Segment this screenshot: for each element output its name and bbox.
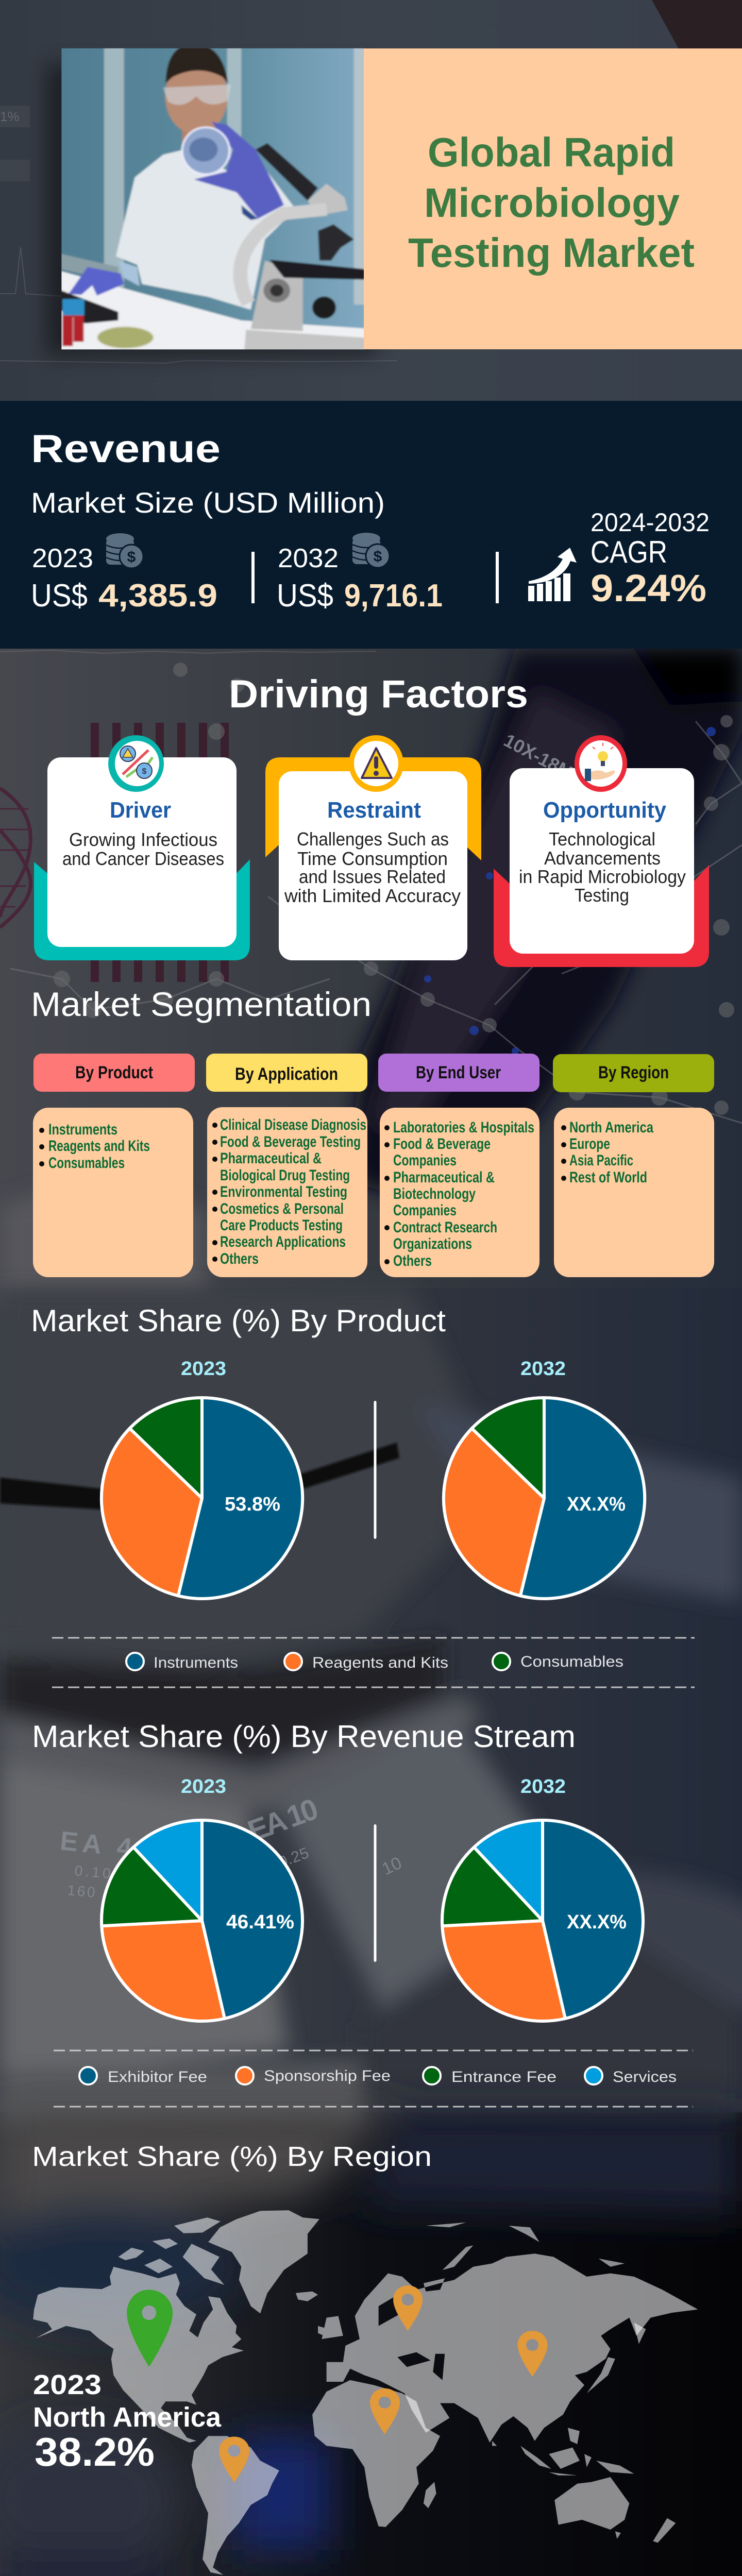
pie chart: product 2023	[102, 1358, 302, 1599]
stat 2032: 2032	[278, 544, 339, 573]
microscope lens lettering: EA 10	[243, 1792, 323, 1848]
pie chart: revenue stream 2023: 2023	[181, 1776, 226, 1798]
microscope lens lettering	[59, 1792, 405, 1901]
legend: product: Reagents and Kits	[312, 1654, 448, 1671]
restraint text: and Issues Related	[299, 866, 446, 887]
hero banner	[46, 40, 742, 358]
title text: Global Rapid	[428, 129, 675, 175]
divider	[374, 1824, 376, 1962]
photo: scientist with petri dish and microscope	[61, 48, 364, 349]
map pins	[127, 2285, 547, 2483]
legend: revenue stream: Sponsorship Fee	[264, 2067, 391, 2084]
pie chart: product 2032	[444, 1358, 645, 1599]
divider	[496, 552, 499, 603]
regional callout: North America	[33, 2402, 222, 2433]
stat 2032: US$	[277, 578, 333, 614]
segment: by end user	[378, 1054, 539, 1277]
market size subtitle: Market Size (USD Million)	[31, 486, 385, 519]
segment: by end user: Others	[393, 1252, 432, 1269]
segment: by end user: Contract Research	[393, 1219, 497, 1236]
icon: hand with light bulb	[575, 735, 627, 792]
segment: by region: Asia Pacific	[569, 1152, 633, 1169]
opportunity text	[519, 828, 686, 906]
driver text	[62, 829, 224, 869]
segment: by end user: Organizations	[393, 1235, 472, 1252]
segment: by application: Pharmaceutical &	[220, 1150, 322, 1167]
icon: driver gears and arrows	[108, 735, 164, 792]
segment: by end user: Food & Beverage	[393, 1136, 491, 1153]
segment: by product	[33, 1054, 195, 1277]
panel: restraint	[265, 735, 481, 960]
segment: by application: Environmental Testing	[220, 1183, 347, 1200]
segment: by end user: Pharmaceutical &	[393, 1169, 495, 1186]
legend: product: Instruments	[154, 1654, 238, 1671]
stat 2032: 9,716.1	[344, 578, 443, 614]
pin: south america	[219, 2437, 249, 2483]
segment: by application: Clinical Disease Diagnosis	[220, 1116, 366, 1133]
opportunity heading: Opportunity	[543, 798, 667, 823]
stat 2023: 2023	[32, 544, 93, 573]
title text	[408, 129, 695, 276]
pie chart: revenue stream 2032: 2032	[520, 1776, 566, 1798]
tube lettering: 10X-18MM	[500, 730, 591, 791]
segment: by product: Consumables	[48, 1155, 125, 1172]
pin: asia	[518, 2331, 547, 2377]
icon: coins 2032: $	[374, 548, 382, 565]
revenue band	[0, 401, 742, 649]
segment: by application: Cosmetics & Personal	[220, 1200, 344, 1217]
pie chart: revenue stream 2032	[442, 1776, 643, 2021]
pie chart: revenue stream 2023: 46.41%	[226, 1911, 294, 1933]
revenue heading: Revenue	[31, 427, 221, 471]
opportunity text: Technological	[549, 828, 655, 850]
legend: revenue stream: Exhibitor Fee	[108, 2069, 207, 2086]
segment: by application: Care Products Testing	[220, 1217, 343, 1234]
segment: by end user: Laboratories & Hospitals	[393, 1119, 534, 1136]
segment: by region: Rest of World	[569, 1169, 647, 1186]
title text: Microbiology	[424, 180, 680, 226]
stat 2023: US$	[31, 578, 88, 614]
microscope lens lettering: 160	[66, 1882, 96, 1901]
restraint heading: Restraint	[327, 798, 421, 823]
microscope lens lettering: 10	[379, 1853, 405, 1879]
regional callout: 38.2%	[35, 2429, 155, 2475]
panel: driver	[34, 735, 250, 960]
divider	[374, 1401, 376, 1539]
regional callout	[33, 2369, 222, 2475]
segment: by application: By Application	[235, 1064, 338, 1084]
segment: by application: Food & Beverage Testing	[220, 1133, 361, 1150]
opportunity text: Advancements	[544, 848, 661, 869]
legend: product: Consumables	[520, 1653, 623, 1670]
regional callout: 2023	[33, 2369, 102, 2400]
pin: europe	[393, 2285, 423, 2331]
heading: market share by revenue stream: Market Share (%) By Revenue Stream	[32, 1719, 576, 1754]
driver heading: Driver	[110, 798, 171, 823]
title panel	[364, 48, 742, 349]
opportunity text: in Rapid Microbiology	[519, 866, 686, 887]
cagr stat: CAGR	[591, 535, 667, 569]
legend: product	[52, 1638, 695, 1687]
segment: by end user: Companies	[393, 1152, 457, 1169]
driver text: and Cancer Diseases	[62, 848, 224, 869]
icon: growth chart arrow	[528, 548, 577, 601]
segment: by end user: Companies	[393, 1202, 457, 1219]
divider	[251, 552, 255, 603]
segment: by product: Reagents and Kits	[48, 1138, 150, 1155]
legend: revenue stream: Services	[613, 2069, 677, 2086]
pie chart: revenue stream 2032: XX.X%	[567, 1911, 627, 1933]
restraint text: Challenges Such as	[297, 828, 449, 850]
icon: driver gears and arrows: $	[142, 767, 147, 776]
pie chart: product 2032: XX.X%	[567, 1494, 626, 1515]
segment: by application	[206, 1054, 367, 1277]
heading: market share by region: Market Share (%) By Region	[32, 2141, 432, 2172]
world map	[33, 2210, 698, 2575]
legend: revenue stream	[54, 2050, 693, 2107]
heading: driving factors: Driving Factors	[229, 672, 528, 716]
microscope lens lettering: 0.25	[276, 1844, 311, 1871]
segment: by application: Research Applications	[220, 1233, 346, 1250]
photo shadow	[46, 64, 376, 355]
faint axis text: 1%	[0, 109, 20, 124]
pie chart: revenue stream 2023	[102, 1776, 302, 2021]
legend: revenue stream: Entrance Fee	[451, 2069, 556, 2086]
pie chart: product 2023: 2023	[181, 1358, 226, 1380]
icon: coins 2023	[106, 533, 143, 568]
opportunity text: Testing	[575, 885, 629, 906]
icon: coins 2032	[352, 533, 390, 568]
segment: by region: By Region	[598, 1063, 669, 1082]
stat 2023: 4,385.9	[98, 578, 217, 614]
panel: opportunity	[494, 735, 709, 967]
pin: africa	[370, 2388, 400, 2434]
pie chart: product 2032: 2032	[520, 1358, 566, 1380]
cagr stat: 2024-2032	[591, 508, 710, 537]
microscope lens lettering: EA 4	[59, 1826, 133, 1863]
microscope lens lettering: 0.10	[74, 1862, 111, 1882]
segment: by application: Others	[220, 1250, 259, 1267]
title text: Testing Market	[408, 230, 695, 276]
stat 2023	[31, 544, 217, 614]
segment: by application: Biological Drug Testing	[220, 1167, 350, 1184]
segment: by end user: By End User	[416, 1063, 501, 1082]
restraint text: Time Consumption	[297, 848, 448, 869]
segment: by end user: Biotechnology	[393, 1185, 476, 1202]
pie chart: product 2023: 53.8%	[225, 1494, 280, 1515]
cagr stat	[591, 508, 710, 609]
driver text: Growing Infectious	[69, 829, 217, 850]
segment: by region: North America	[569, 1119, 653, 1136]
pin: north america	[127, 2290, 173, 2367]
icon: warning triangle	[349, 735, 403, 792]
segment: by product: By Product	[75, 1063, 153, 1082]
cagr stat: 9.24%	[591, 567, 706, 609]
heading: market segmentation: Market Segmentation	[31, 985, 372, 1023]
heading: market share by product: Market Share (%) By Product	[31, 1303, 446, 1338]
segment: by region	[553, 1054, 714, 1277]
icon: coins 2023: $	[127, 549, 136, 566]
restraint text	[284, 828, 461, 906]
segment: by region: Europe	[569, 1136, 610, 1153]
decorative backdrop: chart bars, DNA, molecule network	[0, 663, 742, 1123]
stat 2032	[277, 544, 443, 614]
restraint text: with Limited Accuracy	[284, 885, 461, 906]
segment: by product: Instruments	[48, 1121, 117, 1138]
